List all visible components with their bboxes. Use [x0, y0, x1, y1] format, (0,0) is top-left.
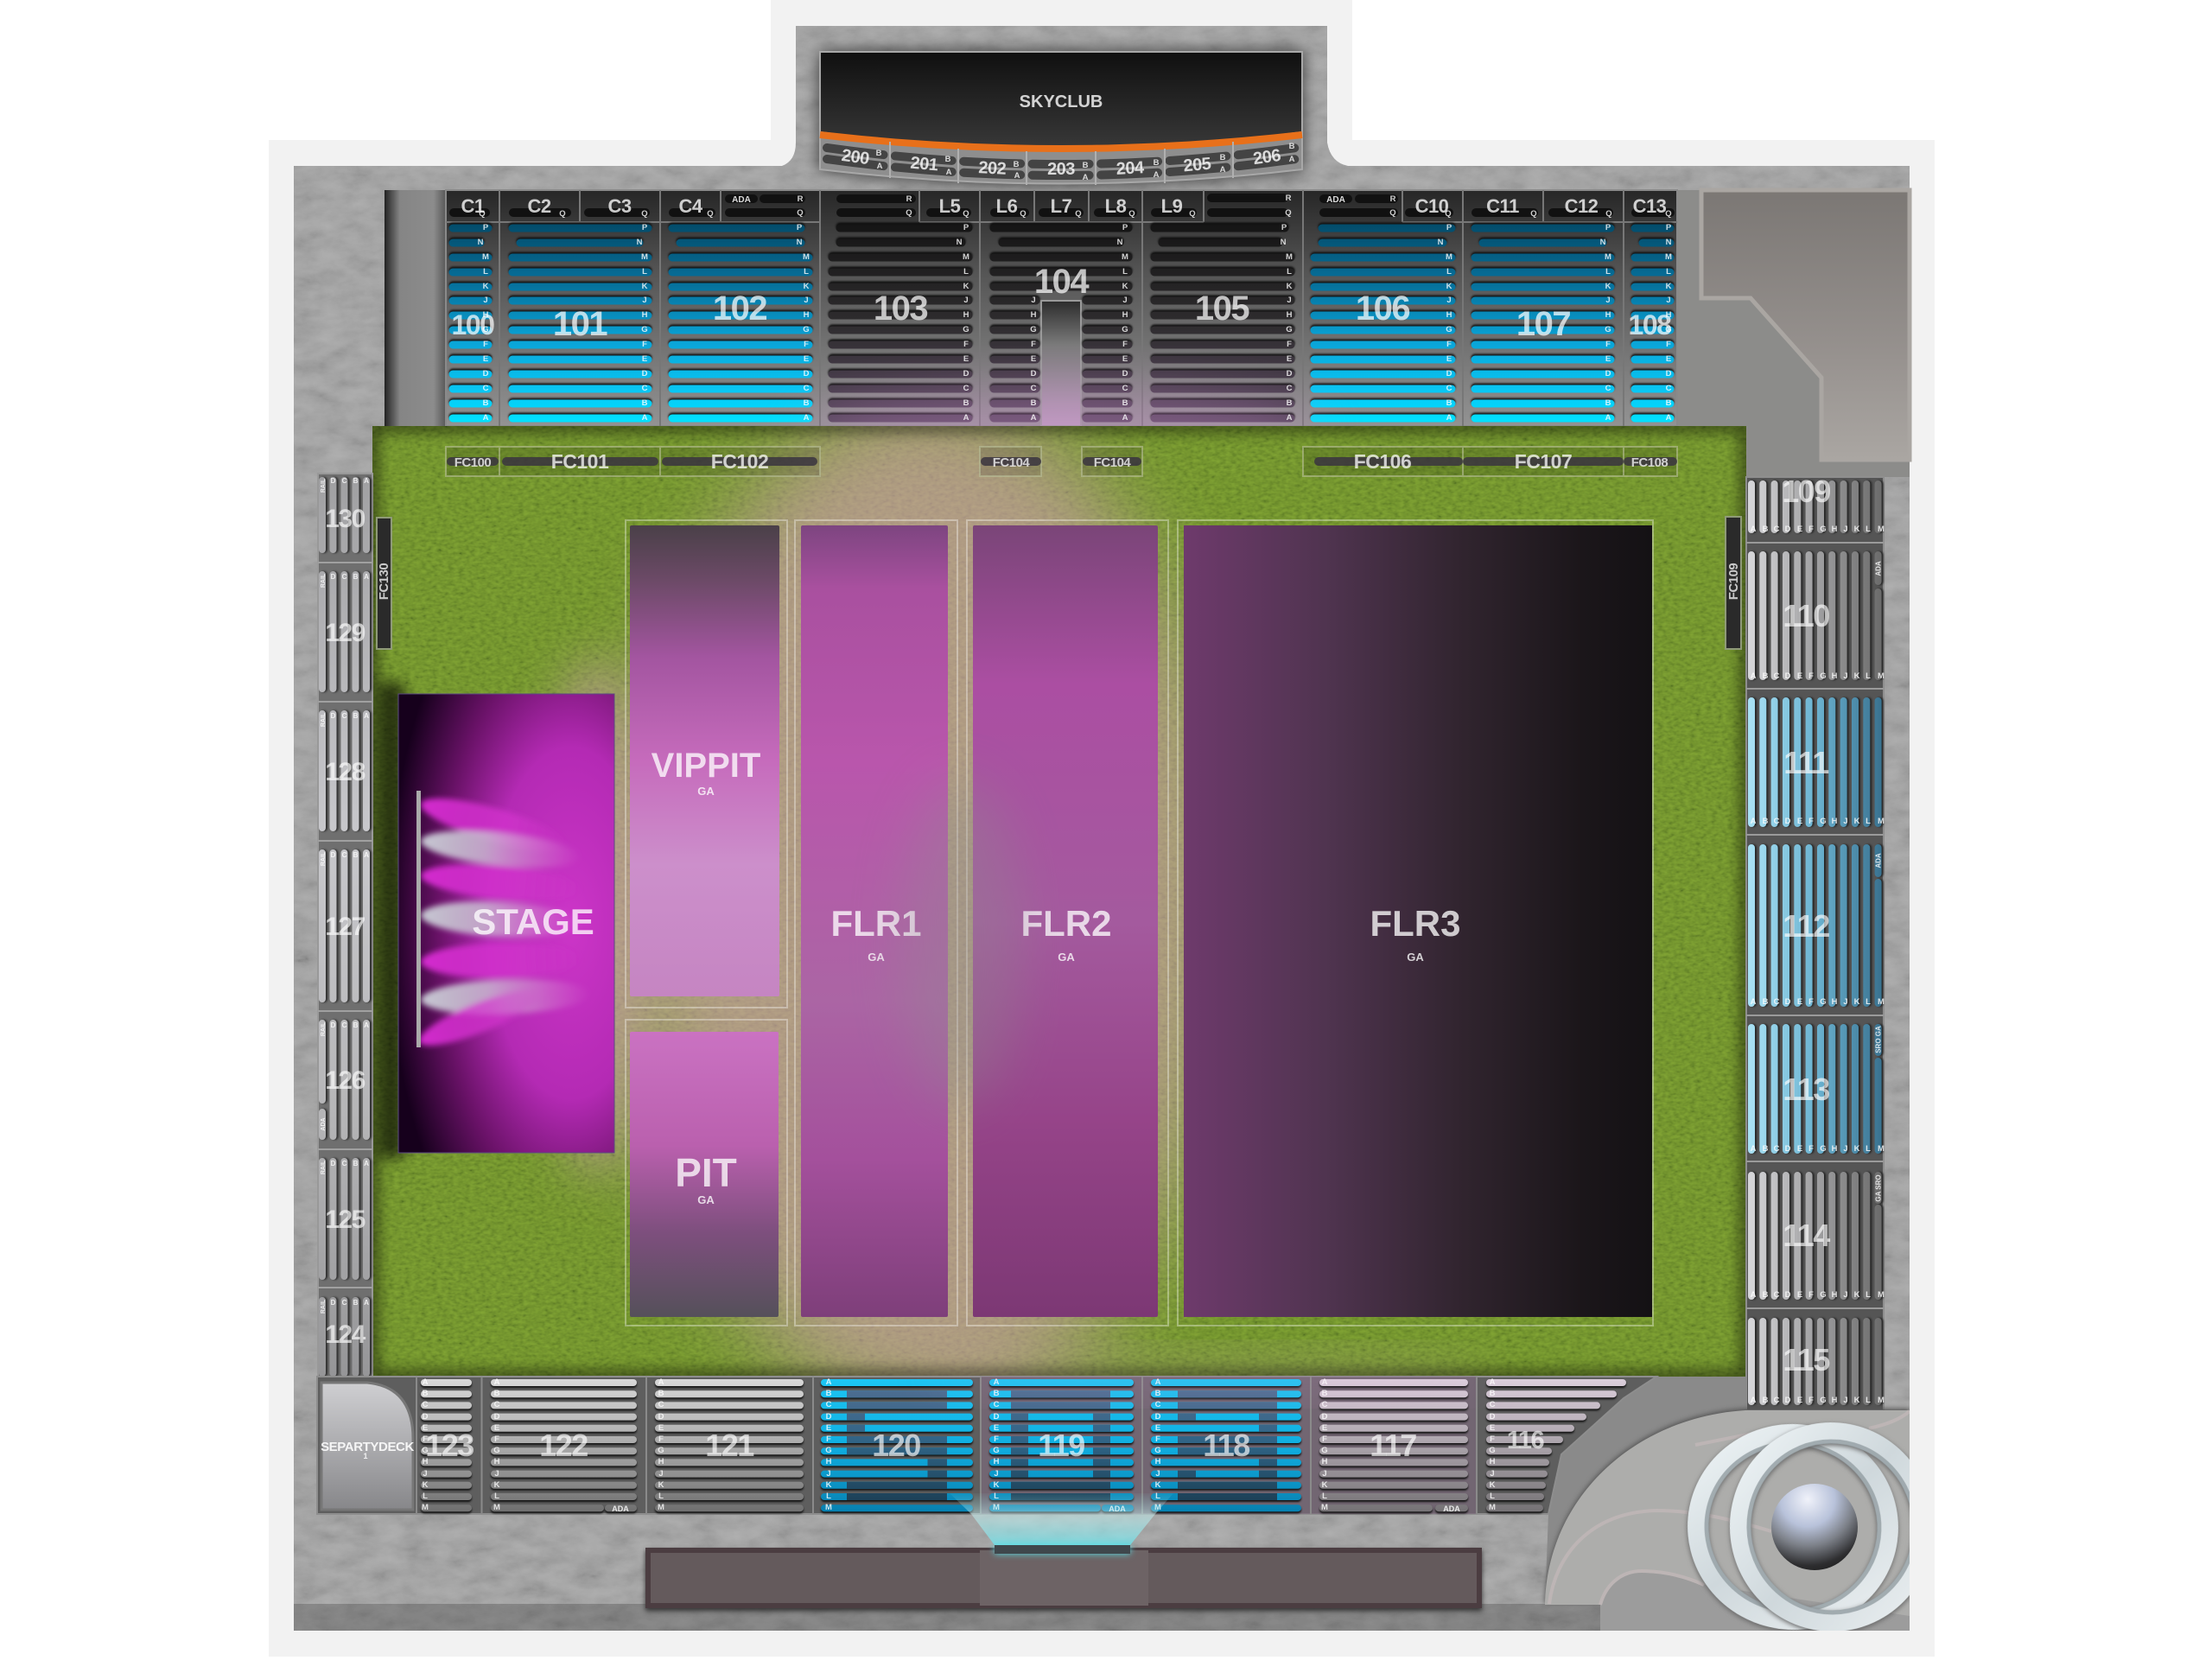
panel: field [372, 398, 1746, 1417]
panel: upper seating background [446, 190, 1677, 426]
section 105 rows [1154, 228, 1291, 418]
panel: bottom seating background [317, 1377, 1656, 1514]
right stands 109 to 115: 113 [1783, 1072, 1829, 1107]
floor: PIT: PIT [675, 1150, 737, 1195]
bottom stage riser box [648, 1550, 1479, 1606]
left stands 124 to 130: RAIL [321, 478, 327, 493]
FC row front concessions: FC107 [1515, 450, 1572, 473]
floor: VIPPIT: GA [697, 785, 715, 798]
floor: FLR3: FLR3 [1370, 903, 1460, 944]
FC row front concessions: FC108 [1631, 455, 1668, 470]
upper row letters: PNMLKJHGFEDCBA [1600, 223, 1611, 423]
left stands 124 to 130: 124 [325, 1320, 366, 1349]
upper row letters: RQRQRQRQ [797, 194, 1396, 218]
stage [398, 694, 614, 1153]
FC row front concessions: FC101 [551, 450, 609, 473]
speckled darker wedge beside section 116 [1545, 1377, 1746, 1605]
upper seat headers: L9 [1161, 195, 1183, 217]
left stands 124 to 130: DCBA [331, 1299, 369, 1307]
left stands 124 to 130: DCBA [331, 573, 369, 581]
bottom row letters: ABCDEFGHJKLM [658, 1377, 664, 1512]
sections 200 to 206: 200 [841, 146, 871, 169]
right stands 109 to 115: ABCDEFGHJKLM [1751, 671, 1885, 681]
upper seat headers: C13 [1633, 195, 1667, 217]
stage halo glow [544, 657, 648, 1175]
bottom ADA tags [612, 1504, 1460, 1513]
bottom row letters [422, 1377, 1496, 1512]
sections 200 to 206: AAAAAAA [877, 155, 1295, 182]
bottom row letters: ABCDEFGHJKLM [1489, 1377, 1496, 1512]
notch inside section 104 [1041, 301, 1081, 426]
bottom section numbers: 121 [705, 1428, 754, 1463]
bottom section numbers: 119 [1038, 1428, 1084, 1463]
stage shadow [378, 683, 404, 1158]
sections 200 to 206: 205 [1183, 155, 1212, 175]
section 101 rows [512, 228, 648, 418]
upper row letters: PNMLKJHGFEDCBA [797, 223, 810, 423]
corner thin arcs [1549, 1411, 1910, 1605]
right stands 109 to 115: ABCDEFGHJKLM [1751, 997, 1885, 1007]
upper section numbers: 103 [874, 289, 927, 328]
left stands 124 to 130: 125 [325, 1205, 365, 1234]
left stand numbers: 130 [325, 505, 365, 533]
upper seat headers: C2 [527, 195, 551, 217]
right stands 109 to 115: ABCDEFGHJKLM [1751, 1144, 1885, 1154]
upper seat headers: C10 [1415, 195, 1449, 217]
projector beam [950, 1493, 1173, 1554]
floor: FLR2: FLR2 [1021, 903, 1111, 944]
FC130 side concession: FC130 [377, 563, 391, 600]
front ring [1731, 1424, 1933, 1630]
stage label: STAGE [472, 901, 594, 942]
sections 200 to 206: 201 [910, 154, 939, 175]
top row Q and R dark bars [454, 198, 1670, 213]
upper seat headers: C11 [1486, 195, 1519, 217]
sections 200 to 206: BBBBBBB [876, 142, 1295, 170]
skyclub label: SKYCLUB [1020, 92, 1103, 111]
upper row letters [478, 194, 1672, 423]
upper seat headers: C1 [461, 195, 485, 217]
pink glow on lower seating [925, 1357, 1495, 1391]
stage lights [414, 788, 591, 1056]
panel: skyclub [820, 52, 1302, 183]
concrete venue floor [294, 0, 1910, 1631]
left stands 124 to 130 [318, 474, 372, 1377]
upper section numbers [452, 263, 1671, 343]
FC row front concessions: FC104 [993, 455, 1030, 470]
bottom section numbers: 116 [1507, 1427, 1545, 1454]
upper section numbers: 106 [1356, 289, 1409, 328]
right stands 109 to 115: 111 [1783, 745, 1829, 780]
floor: FLR2 [973, 525, 1158, 1317]
left stands 124 to 130: RAIL [321, 573, 327, 588]
sphere [1771, 1484, 1858, 1570]
back ring [1686, 1422, 1900, 1632]
bottom section numbers: 123 [425, 1428, 474, 1463]
floor: VIPPIT [630, 525, 779, 996]
bottom section numbers [425, 1427, 1545, 1463]
left stands 124 to 130: DCBA [331, 851, 369, 859]
FC row front concessions: FC102 [711, 450, 768, 473]
upper section numbers: 104 [1034, 263, 1090, 301]
blue rows: sections 100, 101, 102, 106, 107, 108 [453, 228, 1670, 418]
floor section frames [626, 520, 1653, 1326]
blue rows 118 119 120 [824, 1383, 1298, 1508]
section 106 rows [1314, 228, 1452, 418]
floor: FLR2: GA [1058, 951, 1075, 964]
recessed well left of section 100 [385, 190, 446, 426]
right stands 109 to 115: 114 [1783, 1218, 1830, 1253]
FC row front concessions: FC104 [1094, 455, 1131, 470]
gray seat columns 109 110 114 115 [1751, 484, 1878, 1402]
upper section numbers: 108 [1629, 309, 1671, 340]
upper row letters: JHGFEDCBA [1030, 296, 1037, 423]
upper row letters: PNMLKJHGFEDCBA [1281, 223, 1293, 423]
bottom row letters: ABCDEFGHJKLM [993, 1377, 1000, 1512]
left stands 124 to 130: DCBA [331, 1021, 369, 1029]
floor: FLR3: GA [1407, 951, 1424, 964]
bottom row letters: ABCDEFGHJKLM [825, 1377, 832, 1512]
right stands 109 to 115: ADA [1875, 561, 1882, 576]
SEPARTYDECK: 1 [363, 1452, 368, 1460]
bottom corner concrete zone [1545, 1377, 1910, 1631]
right stands 109 to 115: ABCDEFGHJKLM [1751, 1290, 1885, 1300]
floor: VIPPIT: VIPPIT [652, 747, 760, 785]
upper row letters: PNMLKJHGFEDCBA [478, 223, 489, 423]
left stands 124 to 130: ADA [321, 1117, 327, 1131]
floor: FLR1: FLR1 [831, 903, 921, 944]
field shadow near edges [372, 426, 1746, 1377]
floor: PIT: GA [697, 1193, 715, 1206]
haze across floor sections [900, 778, 1021, 1106]
SEPARTYDECK [321, 1383, 414, 1510]
upper section numbers: 101 [553, 305, 607, 343]
right stands 109 to 115: 110 [1783, 598, 1829, 633]
section 104 rows [994, 228, 1128, 418]
left stands 124 to 130: RAIL [321, 1299, 327, 1314]
section 102 rows [672, 228, 809, 418]
bottom row letters: ABCDEFGHJKLM [493, 1377, 500, 1512]
darker concrete around top right block [1677, 190, 1910, 477]
left stands 124 to 130: 126 [325, 1066, 365, 1095]
upper seat headers: C4 [678, 195, 703, 217]
bottom row letters: ABCDEFGHJKLM [422, 1377, 429, 1512]
dark rows: sections 103, 104, 105 [832, 228, 1291, 418]
sculpture rings and sphere [1686, 1422, 1933, 1632]
right stands 109 to 115: SRO GA [1875, 1026, 1882, 1053]
upper seat headers: L5 [939, 195, 961, 217]
section 103 rows [832, 228, 969, 418]
orange skyclub edge [820, 135, 1302, 149]
bottom section numbers: 122 [539, 1428, 588, 1463]
left stands 124 to 130: RAIL [321, 1021, 327, 1036]
FC109 side concession [1726, 517, 1741, 649]
held seat overlays [847, 1394, 1277, 1497]
FC109 side concession: FC109 [1726, 563, 1741, 600]
FC row front concessions: FC100 [454, 455, 491, 470]
section 107 rows [1475, 228, 1611, 418]
left stands 124 to 130: 127 [325, 913, 365, 941]
left stands 124 to 130: DCBA [331, 1160, 369, 1167]
right stands 109 to 115: ADA [1875, 853, 1882, 868]
sections 200 to 206: 203 [1047, 160, 1075, 179]
sections 200 to 206 [827, 142, 1296, 185]
section 100 rows [453, 228, 488, 418]
right stands 109 to 115: 115 [1783, 1342, 1830, 1377]
sections 200 to 206: 206 [1252, 146, 1282, 169]
upper seat headers: L6 [996, 195, 1018, 217]
right stands 109 to 115: ABCDEFGHJKLM [1751, 1396, 1885, 1405]
sections 200 to 206: 202 [978, 158, 1007, 179]
upper section numbers: 107 [1516, 305, 1570, 343]
upper row letters: PNMLKJHGFEDCBA [957, 223, 969, 423]
left stand row letters: DCBA [331, 477, 369, 485]
outer light backing shape [269, 0, 1935, 1657]
right stand row letters: ABCDEFGHJKLM [1751, 525, 1885, 534]
right stands 109 to 115: ABCDEFGHJKLM [1751, 817, 1885, 826]
bottom row letters: ABCDEFGHJKLM [1154, 1377, 1161, 1512]
upper row letters: PNMLKJHGFEDCBA [1438, 223, 1452, 423]
upper row letters: QQQQQQQQQQQQQ [479, 209, 1672, 219]
FC row front concessions: FC106 [1354, 450, 1411, 473]
upper seat headers: L7 [1051, 195, 1072, 217]
lighter concrete block top right [1701, 190, 1910, 460]
pink glow on lower stands [804, 389, 1322, 475]
section 108 rows [1635, 228, 1670, 418]
right stands 109 to 115: GA SRO [1875, 1174, 1882, 1202]
floor: FLR1 [801, 525, 948, 1317]
bottom ADA tags: ADA [612, 1504, 629, 1513]
bottom ADA tags: ADA [1443, 1504, 1460, 1513]
floor: FLR1: GA [868, 951, 885, 964]
upper seat headers: C12 [1565, 195, 1599, 217]
right stands 109 to 115 [1746, 474, 1885, 1410]
FC row front concessions [446, 447, 1677, 476]
right stand numbers: 109 [1782, 474, 1830, 509]
blue seat columns 111 112 113 [1751, 701, 1878, 1150]
bottom ADA tags: ADA [1109, 1504, 1126, 1513]
upper seat headers [461, 195, 1667, 217]
section dividers upper [446, 190, 1677, 426]
upper row letters: PNMLKJHGFEDCBA [1117, 223, 1128, 423]
left stands 124 to 130: DCBA [331, 712, 369, 720]
lower concrete corner [1600, 1571, 1910, 1631]
upper section numbers: 102 [713, 289, 766, 328]
left stands 124 to 130: RAIL [321, 851, 327, 866]
left stand seat columns [322, 480, 366, 1373]
gray rows 121 122 123 [424, 1383, 800, 1508]
sections 200 to 206: 204 [1116, 158, 1146, 179]
bottom row letters: ABCDEFGHJKLM [1321, 1377, 1328, 1512]
upper row letters: PNMLKJHGFEDCBA [637, 223, 648, 423]
FC130 side concession [377, 518, 391, 649]
SEPARTYDECK: SEPARTYDECK [321, 1440, 414, 1454]
upper seat headers: C3 [607, 195, 632, 217]
left stands 124 to 130: 128 [325, 758, 365, 786]
upper seat headers: ADA [1326, 195, 1345, 205]
bottom section numbers: 118 [1203, 1428, 1249, 1463]
right stands 109 to 115: 112 [1783, 908, 1829, 944]
floor: FLR3 [1184, 525, 1652, 1317]
left stands 124 to 130: RAIL [321, 1160, 327, 1174]
pink gray rows 116 117 [1323, 1383, 1623, 1508]
upper section numbers: 105 [1195, 289, 1249, 328]
left stands 124 to 130: RAIL [321, 712, 327, 727]
upper seat headers: L8 [1105, 195, 1127, 217]
bottom section numbers: 120 [872, 1428, 920, 1463]
left stands 124 to 130: 129 [325, 619, 365, 647]
floor: PIT [630, 1032, 779, 1317]
bottom section numbers: 117 [1370, 1428, 1416, 1463]
upper seat headers: ADA [732, 195, 751, 205]
upper section numbers: 100 [452, 309, 494, 340]
field pink glow [635, 398, 1223, 1417]
corner light arc region [1545, 1410, 1910, 1631]
light truss [416, 791, 421, 1047]
upper row letters: PNMLKJHGFEDCBA [1665, 223, 1672, 423]
